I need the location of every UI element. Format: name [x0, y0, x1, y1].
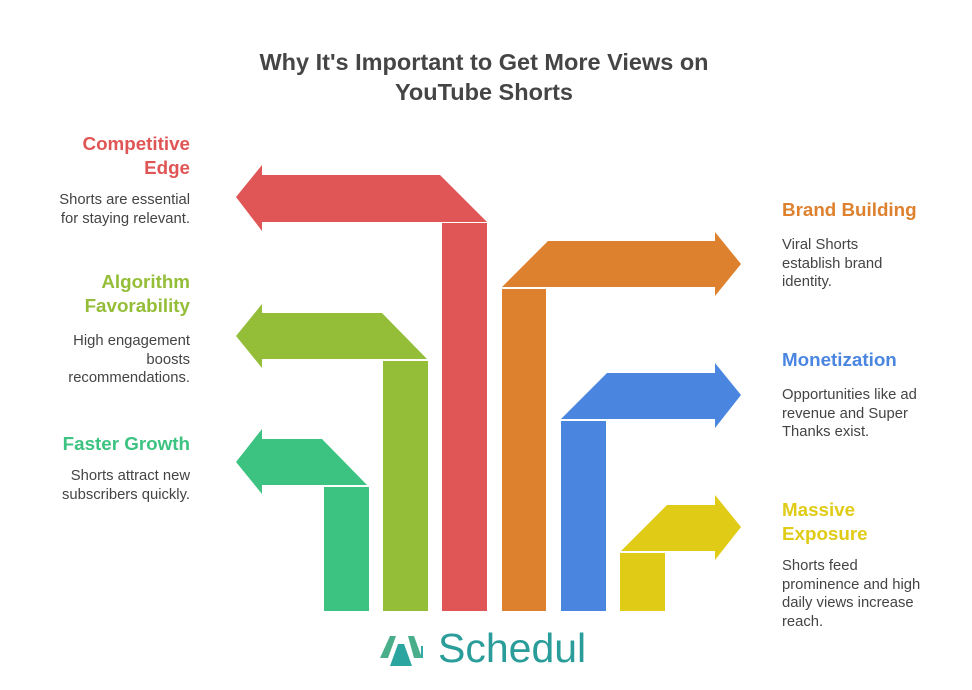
heading: massive exposure	[782, 499, 868, 544]
title	[259, 49, 709, 105]
heading: algorithm favorability: Algorithm	[101, 271, 190, 292]
logo	[380, 625, 586, 671]
arrow: competitive edge (red)	[236, 165, 487, 611]
heading: massive exposure: Massive	[782, 499, 855, 520]
heading: monetization: Monetization	[782, 349, 897, 370]
arrow: brand building (orange)	[502, 232, 741, 611]
arrow: faster growth (teal)	[236, 429, 369, 611]
text: massive exposure: daily views increase	[782, 595, 914, 611]
text: faster growth: subscribers quickly.	[62, 486, 190, 502]
text: brand building: Viral Shorts	[782, 237, 858, 253]
heading: algorithm favorability	[85, 271, 190, 316]
heading: competitive edge	[82, 133, 190, 178]
icon: logo A	[380, 636, 423, 666]
text: faster growth	[62, 468, 190, 502]
heading: massive exposure: Exposure	[782, 523, 868, 544]
text: brand building: establish brand	[782, 256, 882, 272]
title: YouTube Shorts	[395, 79, 573, 105]
heading: competitive edge: Edge	[144, 157, 190, 178]
arrow: massive exposure (yellow)	[620, 495, 741, 611]
text: competitive edge: for staying relevant.	[61, 210, 190, 226]
text: algorithm favorability: recommendations.	[68, 370, 190, 386]
arrow: algorithm favorability (olive)	[236, 304, 428, 611]
text: monetization: revenue and Super	[782, 406, 908, 422]
text: brand building	[782, 237, 882, 290]
text: monetization: Thanks exist.	[782, 424, 869, 440]
text: algorithm favorability: High engagement	[73, 333, 190, 349]
heading: competitive edge: Competitive	[82, 133, 190, 154]
arrow: monetization (blue)	[561, 363, 741, 611]
text: massive exposure: Shorts feed	[782, 558, 858, 574]
text: Schedul: Schedul	[438, 625, 586, 671]
text: monetization	[782, 387, 917, 440]
text: algorithm favorability	[68, 333, 190, 386]
text: competitive edge	[59, 192, 190, 226]
text: algorithm favorability: boosts	[146, 352, 190, 368]
text: massive exposure	[782, 558, 920, 630]
heading: algorithm favorability: Favorability	[85, 295, 190, 316]
text: competitive edge: Shorts are essential	[59, 192, 190, 208]
text: brand building: identity.	[782, 274, 832, 290]
text: massive exposure: prominence and high	[782, 576, 920, 592]
title: Why It's Important to Get More Views on	[259, 49, 709, 75]
heading: faster growth: Faster Growth	[63, 433, 190, 454]
heading: brand building: Brand Building	[782, 199, 917, 220]
text: monetization: Opportunities like ad	[782, 387, 917, 403]
text: faster growth: Shorts attract new	[71, 468, 190, 484]
text: massive exposure: reach.	[782, 614, 823, 630]
